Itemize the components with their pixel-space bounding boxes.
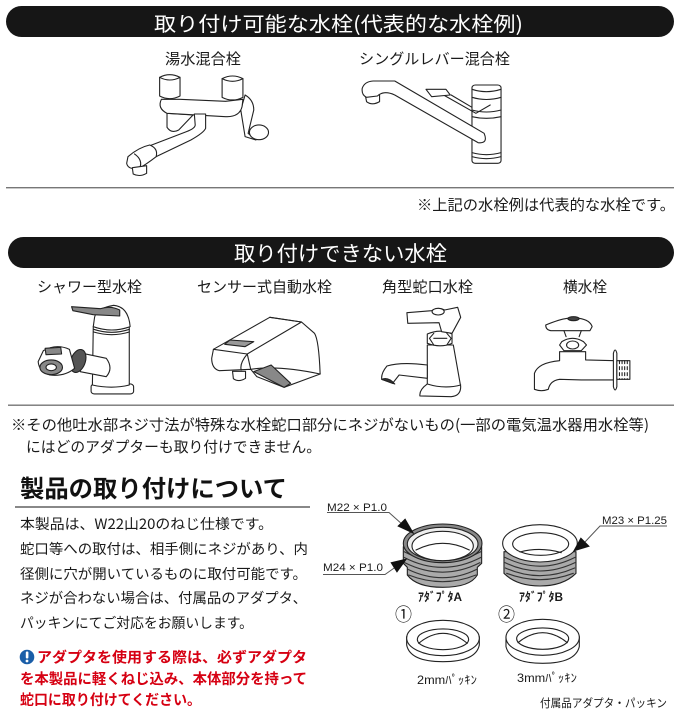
- label: 3mm gasket: 3mmﾊﾟｯｷﾝ: [517, 671, 577, 685]
- callout: M23 thread: [575, 515, 667, 550]
- heading: compatible faucets: 取り付け可能な水栓(代表的な水栓例): [154, 8, 523, 37]
- heading: about installation: 製品の取り付けについて: [20, 476, 287, 503]
- label: number 2: ②: [498, 605, 515, 625]
- text block: product description: [20, 513, 308, 632]
- callout: M23 thread: M23 × P1.25: [602, 515, 667, 527]
- label: number 1: ①: [395, 605, 412, 625]
- note: unsupported faucets: にはどのアダプターも取り付けできません。: [26, 439, 321, 456]
- caption: included parts: 付属品アダプタ・パッキン: [540, 696, 667, 710]
- label: sensor faucet: センサー式自動水栓: [197, 279, 332, 296]
- icon: side faucet: [534, 317, 630, 391]
- text block: product description: ネジが合わない場合は、付属品のアダプタ、: [20, 590, 307, 607]
- heading: incompatible faucets: 取り付けできない水栓: [234, 243, 447, 266]
- callout: M24 thread: M24 × P1.0: [323, 562, 383, 574]
- warning text: [20, 648, 307, 709]
- callout: M22 thread: M22 × P1.0: [327, 502, 387, 514]
- callout: M22 thread: [327, 502, 412, 532]
- icon: shower faucet: [38, 305, 134, 394]
- label: adapter B: ｱﾀﾞﾌﾟﾀB: [519, 589, 563, 604]
- icon: single lever faucet: [362, 81, 501, 163]
- text block: product description: 本製品は、W22山20のねじ仕様です。: [20, 513, 273, 534]
- heading: compatible faucets: [6, 6, 674, 37]
- label: hot and cold mixer: 湯水混合栓: [165, 51, 241, 68]
- diagram: adapter B: [503, 525, 577, 586]
- icon: angular faucet: [382, 307, 461, 397]
- diagram: adapter A: [403, 524, 482, 587]
- note: unsupported faucets: ※その他吐水部ネジ寸法が特殊な水栓蛇口部分にネジがないもの(一部の電気温水器用水栓等): [11, 414, 649, 435]
- label: 2mm gasket: 2mmﾊﾟｯｷﾝ: [417, 673, 477, 687]
- warning text: 蛇口に取り付けてください。: [20, 692, 201, 709]
- text block: product description: 径側に穴が開いているものに取付可能です。: [20, 566, 307, 583]
- label: side faucet: 横水栓: [563, 279, 607, 296]
- text block: product description: 蛇口等への取付は、相手側にネジがあり、内: [20, 540, 308, 558]
- label: shower faucet: シャワー型水栓: [37, 279, 142, 296]
- label: single lever mixer: シングルレバー混合栓: [359, 51, 510, 68]
- divider rule: [8, 404, 674, 406]
- note: unsupported faucets: [11, 414, 649, 456]
- label: angular faucet: 角型蛇口水栓: [382, 279, 473, 296]
- icon: sensor faucet: [212, 317, 320, 387]
- note: representative faucets: ※上記の水栓例は代表的な水栓です。: [417, 197, 675, 214]
- diagram: 2mm gasket: [407, 620, 479, 662]
- warning text: を本製品に軽くねじ込み、本体部分を持って: [20, 670, 307, 688]
- icon: two handle mixer faucet: [127, 75, 269, 175]
- heading: incompatible faucets: [8, 237, 674, 268]
- diagram: 3mm gasket: [506, 619, 579, 663]
- text block: product description: パッキンにてご対応をお願いします。: [20, 615, 253, 632]
- divider rule: [6, 187, 674, 188]
- underline rule: [15, 506, 310, 508]
- label: adapter A: ｱﾀﾞﾌﾟﾀA: [418, 589, 462, 604]
- icon: exclamation badge: [20, 650, 34, 664]
- warning text: アダプタを使用する際は、必ずアダプタ: [37, 648, 307, 666]
- callout: M24 thread: [323, 560, 405, 574]
